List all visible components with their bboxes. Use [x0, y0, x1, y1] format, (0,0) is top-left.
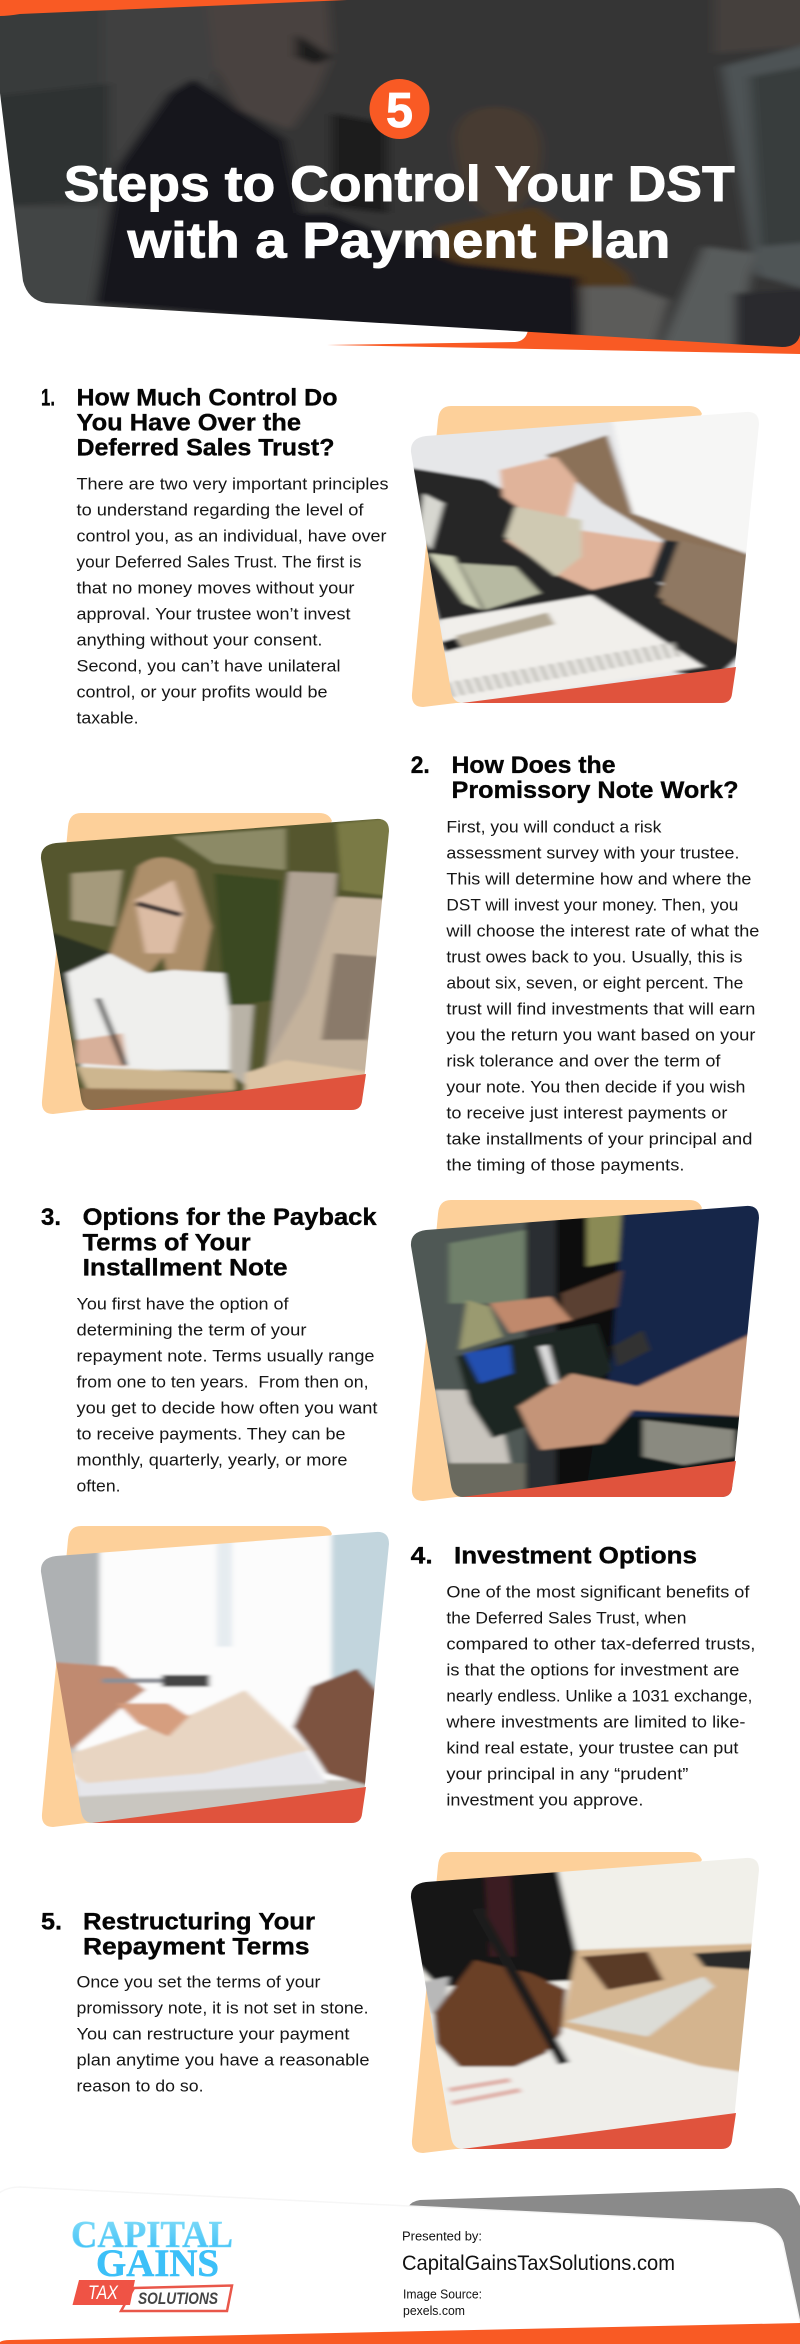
- heading 3: Terms of Your: [83, 1230, 251, 1257]
- body text 1: [76, 475, 388, 727]
- heading 4: 4.: [411, 1542, 433, 1569]
- body text 4: kind real estate, your trustee can put: [446, 1739, 739, 1757]
- body text 1: There are two very important principles: [76, 475, 388, 493]
- panel: section 2: [20, 752, 759, 1175]
- body text 5: You can restructure your payment: [76, 2026, 350, 2044]
- footer grey shape: [408, 2188, 800, 2330]
- heading 1: You Have Over the: [76, 410, 301, 437]
- body text 2: trust will find investments that will earn: [446, 1001, 755, 1019]
- body text 3: determining the term of your: [76, 1321, 307, 1339]
- body text 5: plan anytime you have a reasonable: [76, 2052, 370, 2070]
- body text 2: This will determine how and where the: [446, 871, 751, 889]
- heading 4: Investment Options: [454, 1542, 697, 1569]
- body text 1: that no money moves without your: [76, 579, 355, 597]
- body text 4: investment you approve.: [446, 1791, 643, 1809]
- heading 5: [41, 1908, 315, 1960]
- body text 4: the Deferred Sales Trust, when: [446, 1609, 686, 1627]
- heading 1: [41, 385, 338, 462]
- body text 5: reason to do so.: [76, 2078, 204, 2096]
- title: Steps to Control Your DST: [64, 156, 735, 212]
- body text 2: assessment survey with your trustee.: [446, 845, 739, 863]
- website: CapitalGainsTaxSolutions.com: [402, 2251, 675, 2275]
- heading 1: 1.: [41, 385, 55, 412]
- bottom orange band: [0, 2323, 800, 2344]
- image card 5: hand signing paper: [410, 1852, 759, 2153]
- number badge: 5: [386, 84, 413, 138]
- image source: Image Source:: [403, 2286, 482, 2301]
- panel: section 5: [41, 1843, 781, 2167]
- body text 3: [76, 1295, 378, 1495]
- body text 4: your principal in any “prudent”: [446, 1765, 688, 1783]
- body text 2: DST will invest your money. Then, you: [446, 897, 738, 915]
- body text 1: taxable.: [76, 709, 138, 727]
- heading 3: Options for the Payback: [83, 1204, 377, 1231]
- body text 2: [445, 819, 759, 1175]
- body text 2: your note. You then decide if you wish: [446, 1079, 745, 1097]
- orange band below header: [327, 330, 800, 354]
- body text 1: your Deferred Sales Trust. The first is: [76, 553, 362, 571]
- heading 2: [411, 752, 738, 804]
- header banner: [0, 0, 800, 380]
- heading 3: [41, 1204, 377, 1282]
- heading 2: 2.: [411, 752, 430, 779]
- body text 3: from one to ten years. From then on,: [76, 1373, 368, 1391]
- image source: [403, 2286, 482, 2318]
- logo: Capital Gains Tax Solutions: [71, 2214, 233, 2311]
- heading 1: How Much Control Do: [76, 385, 338, 412]
- body text 2: the timing of those payments.: [446, 1157, 684, 1175]
- body text 5: Once you set the terms of your: [76, 1974, 321, 1992]
- logo: Capital Gains Tax Solutions: TAX: [88, 2283, 119, 2304]
- body text 5: promissory note, it is not set in stone.: [76, 2000, 368, 2018]
- body text 4: One of the most significant benefits of: [446, 1583, 750, 1601]
- top orange band: [0, 0, 347, 16]
- panel: section 1: [41, 385, 781, 727]
- image card 2: woman writing: [40, 813, 389, 1114]
- heading 5: 5.: [41, 1908, 62, 1935]
- panel: section 4: [20, 1517, 755, 1840]
- image card 1: counting money: [411, 406, 759, 707]
- body text 4: compared to other tax-deferred trusts,: [446, 1635, 755, 1653]
- body text 1: approval. Your trustee won’t invest: [76, 605, 351, 623]
- body text 2: trust owes back to you. Usually, this is: [446, 949, 742, 967]
- body text 1: control you, as an individual, have over: [76, 527, 387, 545]
- heading 5: Repayment Terms: [83, 1933, 310, 1960]
- logo: Capital Gains Tax Solutions: CAPITAL: [71, 2214, 233, 2256]
- body text 4: is that the options for investment are: [446, 1661, 739, 1679]
- heading 3: 3.: [41, 1204, 61, 1231]
- body text 3: repayment note. Terms usually range: [76, 1347, 374, 1365]
- presented by: Presented by:: [402, 2229, 482, 2244]
- title: with a Payment Plan: [126, 213, 671, 269]
- body text 1: to understand regarding the level of: [76, 501, 364, 519]
- body text 2: you the return you want based on your: [446, 1027, 756, 1045]
- heading 1: Deferred Sales Trust?: [76, 435, 334, 462]
- heading 2: How Does the: [452, 752, 616, 779]
- body text 1: control, or your profits would be: [76, 683, 328, 701]
- heading 5: Restructuring Your: [83, 1908, 315, 1935]
- body text 5: [76, 1974, 370, 2096]
- body text 3: often.: [76, 1477, 120, 1495]
- footer: [0, 2187, 800, 2344]
- header photo: two men shaking hands: [0, 0, 800, 380]
- footer white panel: [0, 2187, 800, 2344]
- title: [64, 156, 735, 269]
- body text 3: to receive payments. They can be: [76, 1425, 346, 1443]
- heading 3: Installment Note: [83, 1255, 288, 1282]
- logo: Capital Gains Tax Solutions: SOLUTIONS: [138, 2289, 219, 2308]
- body text 4: [445, 1583, 755, 1809]
- number badge: [370, 79, 430, 139]
- panel: section 3: [41, 1190, 781, 1513]
- logo: Capital Gains Tax Solutions: GAINS: [96, 2242, 219, 2285]
- image card 3: wallet: [410, 1200, 759, 1501]
- image card 4: handing over a document: [40, 1526, 389, 1827]
- body text 2: about six, seven, or eight percent. The: [446, 975, 743, 993]
- body text 3: You first have the option of: [76, 1295, 289, 1313]
- body text 4: where investments are limited to like-: [445, 1713, 745, 1731]
- body text 2: to receive just interest payments or: [446, 1105, 728, 1123]
- body text 4: nearly endless. Unlike a 1031 exchange,: [446, 1687, 752, 1705]
- body text 2: will choose the interest rate of what the: [445, 923, 759, 941]
- heading 2: Promissory Note Work?: [452, 777, 738, 804]
- body text 3: monthly, quarterly, yearly, or more: [76, 1451, 348, 1469]
- image source: pexels.com: [403, 2303, 465, 2318]
- body text 1: anything without your consent.: [76, 631, 322, 649]
- body text 2: First, you will conduct a risk: [446, 819, 662, 837]
- body text 3: you get to decide how often you want: [76, 1399, 378, 1417]
- body text 1: Second, you can’t have unilateral: [76, 657, 340, 675]
- body text 2: risk tolerance and over the term of: [446, 1053, 721, 1071]
- body text 2: take installments of your principal and: [446, 1131, 752, 1149]
